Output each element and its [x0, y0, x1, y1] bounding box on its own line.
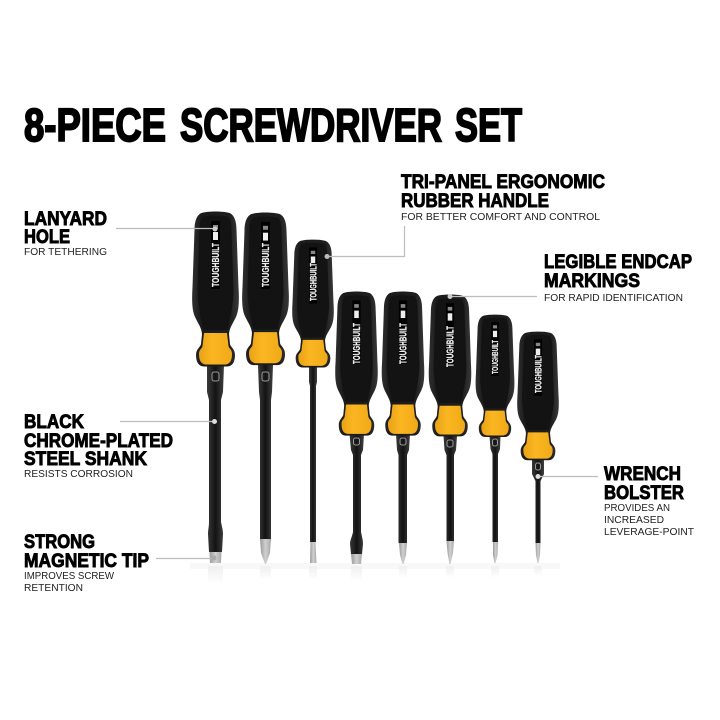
screwdriver 8: stubby small [517, 332, 559, 563]
callout: wrench bolster: BOLSTER [604, 482, 684, 504]
callout: lanyard hole: HOLE [24, 226, 70, 248]
screwdriver 2: phillips large: TOUGHBUILT [261, 243, 272, 287]
callout: strong magnetic tip: RETENTION [24, 582, 83, 594]
screwdriver 1: wide slotted: TOUGHBUILT [211, 243, 222, 287]
callout: black chrome-plated steel shank: RESISTS CORROSION [24, 468, 133, 480]
callout: lanyard hole: LANYARD [24, 208, 107, 230]
screwdriver 1: wide slotted [192, 212, 239, 563]
callout: tri-panel ergonomic rubber handle: FOR BETTER COMFORT AND CONTROL [401, 211, 600, 223]
screwdriver 6: phillips medium: TOUGHBUILT [446, 326, 456, 367]
callout: tri-panel ergonomic rubber handle: TRI-PANEL ERGONOMIC [401, 171, 605, 193]
screwdriver 4: medium slotted: TOUGHBUILT [352, 323, 363, 364]
screwdriver 2: phillips large [242, 213, 289, 564]
callout: strong magnetic tip: IMPROVES SCREW [24, 570, 114, 582]
callout: black chrome-plated steel shank: STEEL SHANK [24, 448, 147, 470]
screwdriver 7: small [476, 315, 514, 563]
callout: tri-panel ergonomic rubber handle: RUBBER HANDLE [401, 190, 549, 212]
callout: wrench bolster: WRENCH [604, 463, 681, 485]
reflection under screwdrivers [190, 563, 560, 584]
callout: tri-panel ergonomic rubber handle [324, 171, 605, 259]
screwdriver 5: phillips medium: TOUGHBUILT [398, 323, 410, 364]
callout: strong magnetic tip [24, 531, 216, 594]
callout: lanyard hole: FOR TETHERING [24, 246, 107, 258]
callout: wrench bolster: LEVERAGE-POINT [604, 526, 695, 538]
callout: legible endcap markings: MARKINGS [544, 270, 640, 292]
callout: black chrome-plated steel shank [24, 411, 217, 480]
callout: wrench bolster [536, 463, 695, 538]
callout: black chrome-plated steel shank: BLACK [24, 411, 84, 433]
screwdriver 3: thin slotted [292, 240, 334, 563]
callout: strong magnetic tip: STRONG [24, 531, 95, 553]
callout: black chrome-plated steel shank: CHROME-PLATED [24, 430, 173, 452]
screwdriver 6: phillips medium [429, 295, 471, 564]
title: SCREWDRIVER [180, 99, 442, 151]
callout: legible endcap markings: FOR RAPID IDENTIFICATION [544, 292, 683, 304]
callout: strong magnetic tip: MAGNETIC TIP [24, 550, 149, 572]
title: 8-PIECE [24, 99, 166, 151]
screwdriver 8: stubby small: TOUGHBUILT [534, 355, 544, 393]
screwdriver 3: thin slotted: TOUGHBUILT [308, 263, 318, 301]
callout: legible endcap markings [448, 251, 692, 304]
screwdriver 5: phillips medium [382, 292, 424, 564]
callout: lanyard hole [24, 208, 218, 258]
screwdriver 4: medium slotted [335, 292, 378, 564]
screwdriver 7: small: TOUGHBUILT [490, 340, 500, 374]
callout: wrench bolster: INCREASED [604, 514, 664, 526]
title [24, 99, 522, 151]
title: SET [455, 99, 522, 151]
callout: legible endcap markings: LEGIBLE ENDCAP [544, 251, 692, 273]
callout: wrench bolster: PROVIDES AN [604, 502, 670, 514]
